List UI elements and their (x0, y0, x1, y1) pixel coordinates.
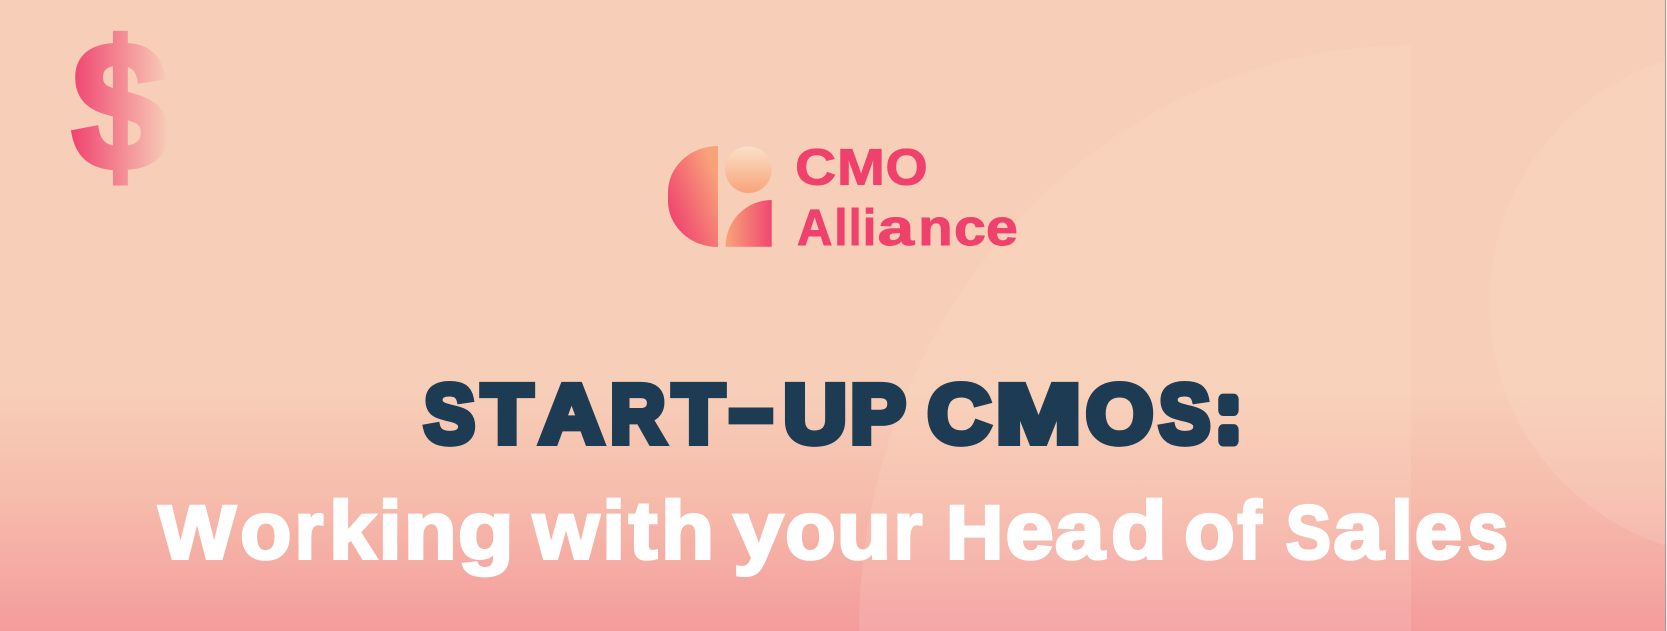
subtitle: a (1055, 486, 1106, 576)
title: S (1159, 368, 1210, 460)
logo wordmark: e (986, 199, 1018, 256)
background shape: right circle (1489, 48, 1667, 558)
subtitle: e (1006, 486, 1054, 576)
subtitle: a (1333, 486, 1385, 576)
logo wordmark: l (849, 199, 861, 256)
title: S (424, 368, 475, 460)
title (424, 362, 1241, 460)
subtitle: t (629, 486, 658, 576)
subtitle: w (532, 486, 599, 576)
subtitle: r (894, 486, 922, 576)
subtitle: o (1184, 486, 1235, 576)
subtitle: l (1391, 486, 1413, 576)
icon: dollar sign: $ (72, 4, 168, 208)
subtitle: k (329, 486, 377, 576)
subtitle: o (785, 486, 836, 576)
subtitle: W (158, 490, 236, 576)
title: C (928, 368, 991, 460)
subtitle: e (1414, 486, 1462, 576)
subtitle: g (458, 486, 514, 576)
subtitle: d (1111, 486, 1167, 576)
logo wordmark: a (878, 199, 915, 256)
title: R (610, 368, 665, 460)
subtitle (158, 486, 1508, 576)
title: T (482, 368, 533, 460)
subtitle: f (1237, 486, 1262, 576)
subtitle: y (733, 486, 784, 576)
title: P (850, 368, 906, 460)
title: - (729, 362, 773, 456)
title: O (1086, 368, 1153, 460)
subtitle: h (661, 486, 714, 576)
title: U (783, 368, 847, 460)
logo wordmark: O (886, 138, 928, 196)
subtitle: s (1467, 486, 1508, 576)
logo wordmark: M (837, 138, 885, 196)
subtitle: r (295, 486, 323, 576)
logo wordmark: C (795, 138, 836, 196)
title: A (540, 368, 604, 460)
title: : (1216, 366, 1241, 459)
logo wordmark: n (918, 199, 953, 256)
subtitle: n (404, 486, 457, 576)
subtitle: i (379, 486, 402, 576)
subtitle: o (240, 486, 291, 576)
logo wordmark: i (863, 199, 876, 256)
logo wordmark: l (834, 199, 848, 256)
title: M (996, 368, 1081, 460)
logo wordmark: A (797, 199, 832, 256)
background shape: large arch (859, 45, 1411, 631)
logo wordmark: c (954, 199, 986, 256)
subtitle: i (602, 486, 625, 576)
title: T (673, 368, 724, 460)
subtitle: u (837, 486, 891, 576)
logo: CMO Alliance (668, 138, 1018, 256)
subtitle: H (946, 490, 1003, 576)
subtitle: S (1286, 490, 1331, 576)
logo wordmark (795, 138, 1018, 256)
logo mark (668, 146, 772, 247)
